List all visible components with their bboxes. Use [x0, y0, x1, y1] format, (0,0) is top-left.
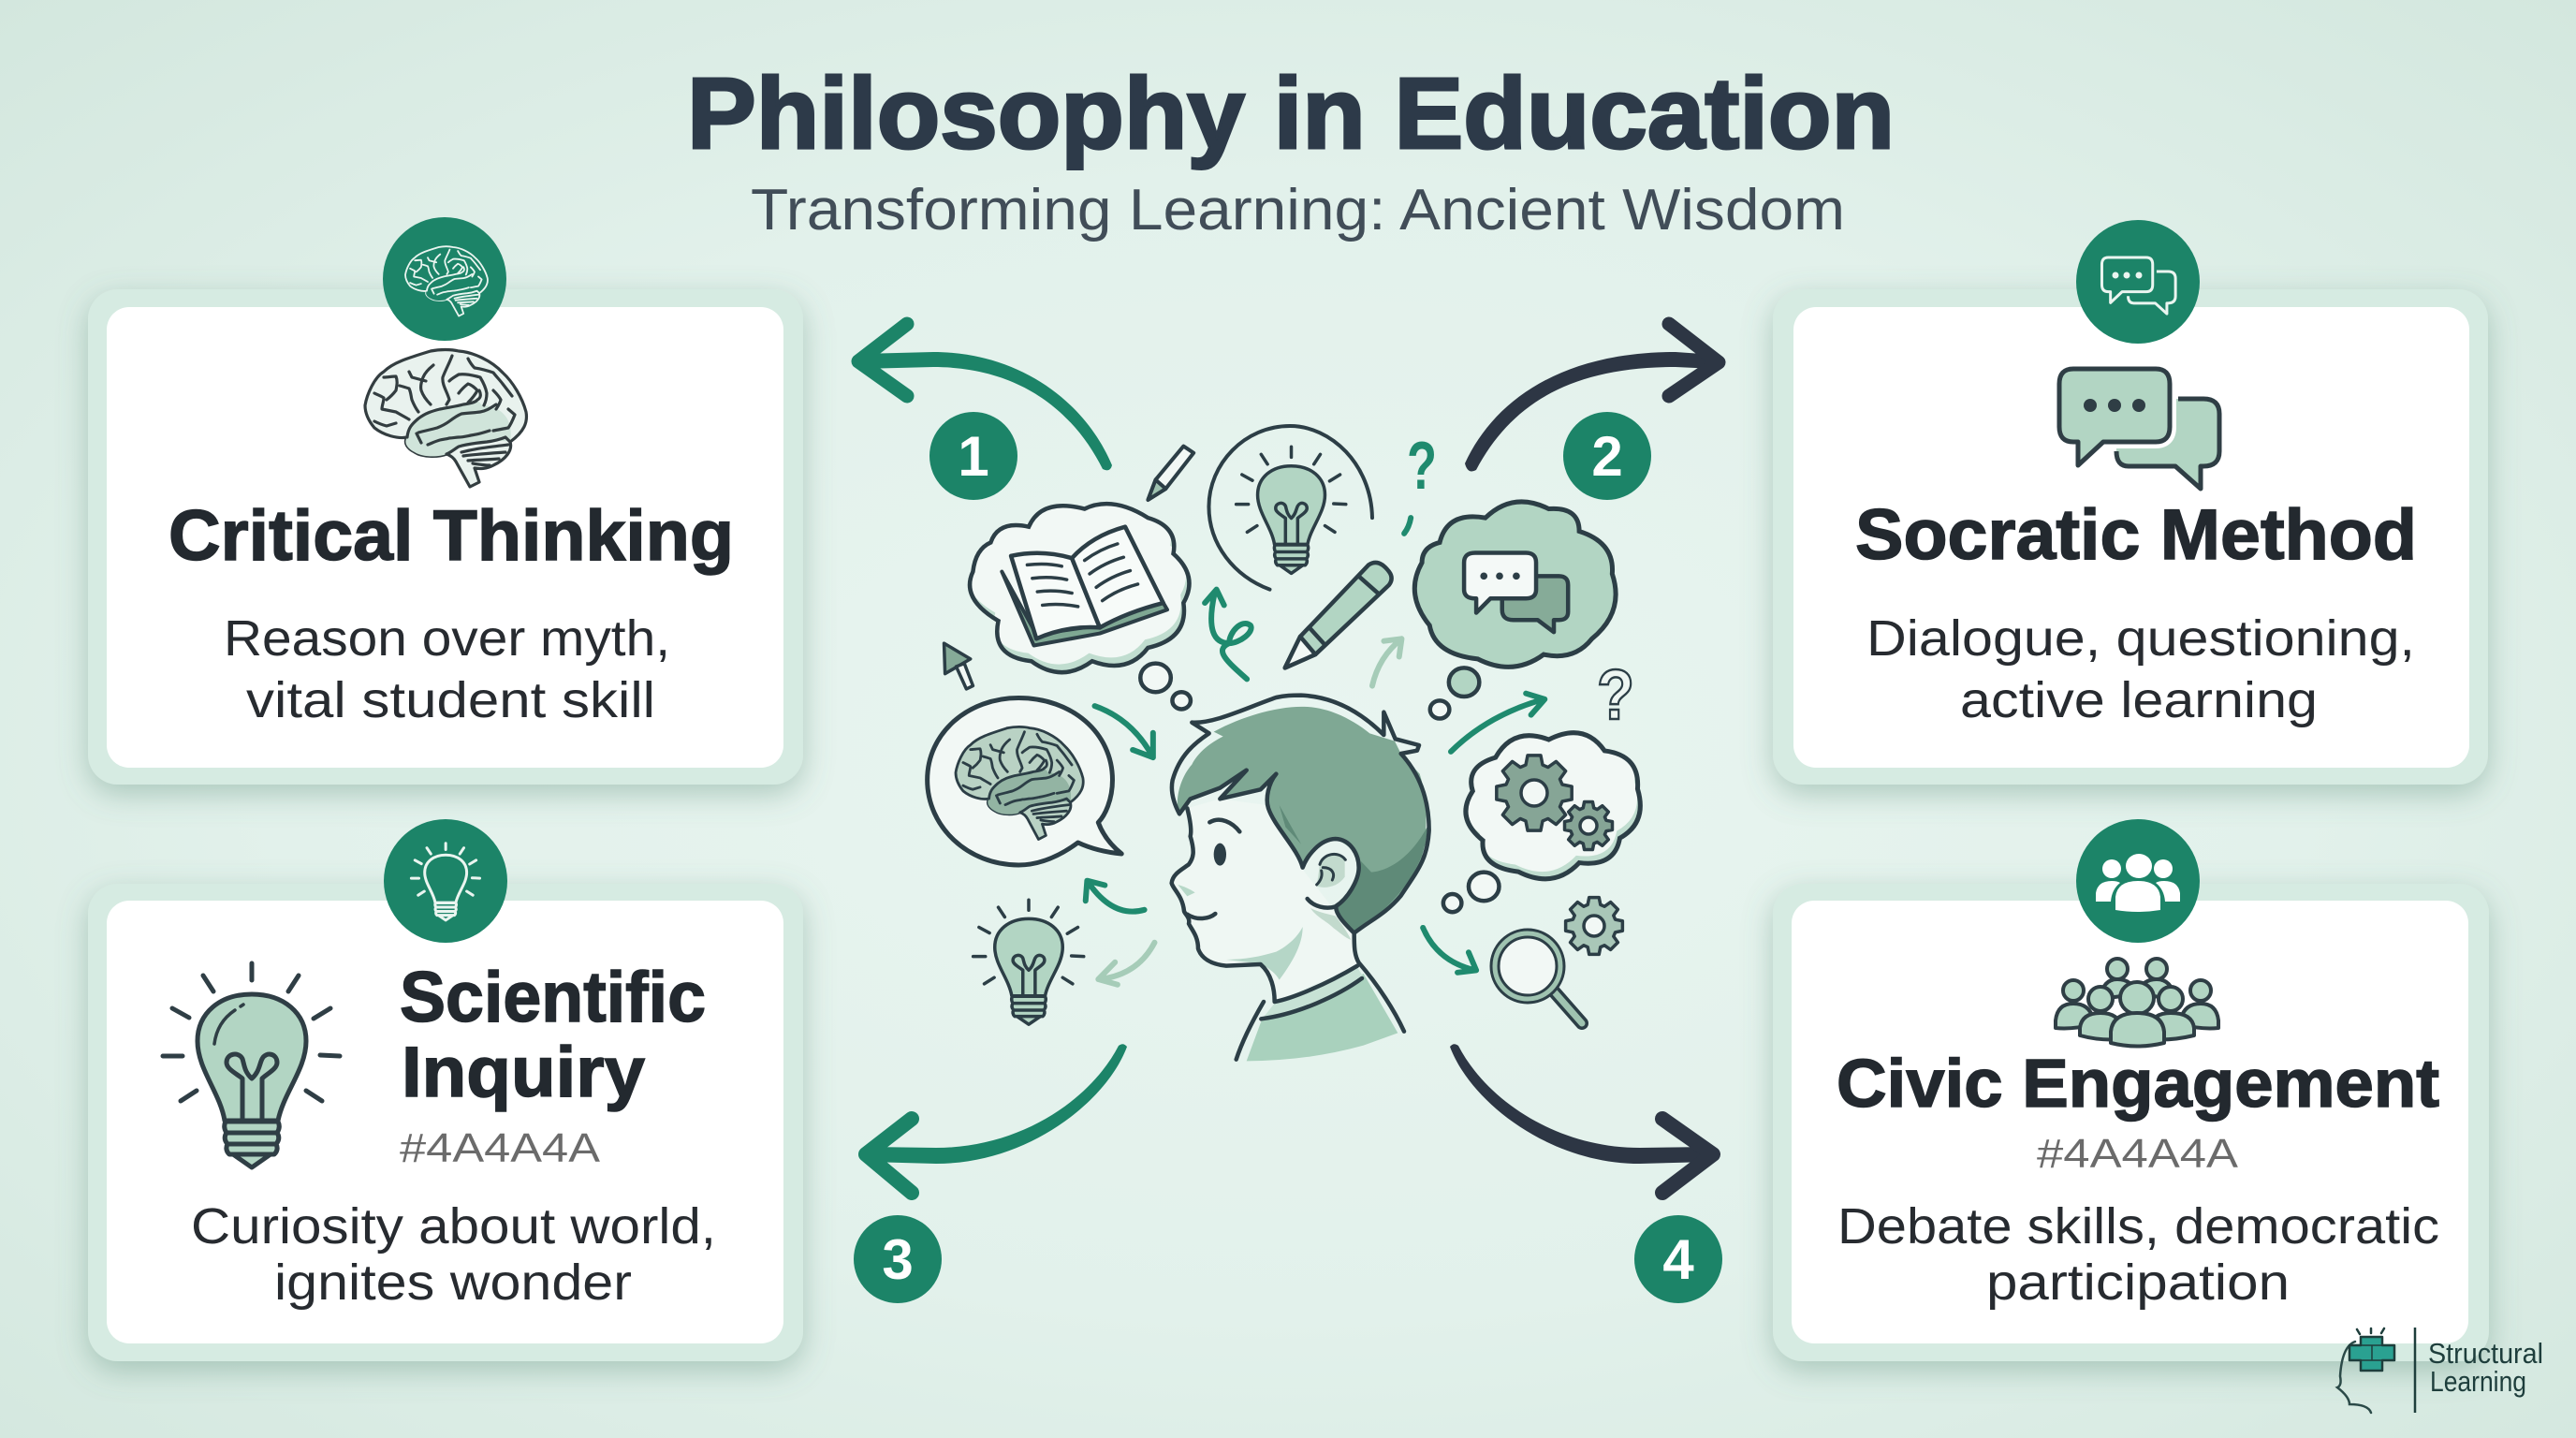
number badge 2: 2 — [1591, 425, 1623, 488]
arrow 1 — [858, 324, 1112, 470]
badge icon: brain — [383, 217, 506, 341]
body text: Dialogue, questioning, — [1866, 610, 2415, 667]
heading: Inquiry — [402, 1033, 645, 1112]
badge icon: light bulb — [384, 819, 507, 943]
body text — [191, 1198, 716, 1311]
body text: Curiosity about world, — [191, 1198, 716, 1255]
heading: Critical Thinking — [168, 496, 734, 576]
icon: light bulb — [163, 963, 340, 1167]
icon: cursor — [944, 643, 973, 689]
icon: brain in bubble — [956, 726, 1083, 840]
question mark: outlined: ? — [1597, 655, 1634, 735]
icon: large gear — [1497, 756, 1572, 830]
speech bubble — [928, 697, 1121, 865]
subtitle: Transforming Learning: Ancient Wisdom — [751, 178, 1845, 242]
number badge 3: 3 — [882, 1228, 914, 1291]
body text: Reason over myth, — [224, 610, 670, 667]
number badge 4 — [1634, 1215, 1722, 1303]
icon: small pencil — [1148, 447, 1193, 500]
number badge 3 — [854, 1215, 942, 1303]
body text: participation — [1986, 1255, 2290, 1311]
icon: bulb lower left — [973, 900, 1084, 1024]
logo: structural learning: Learning — [2430, 1365, 2526, 1398]
panel: socratic method — [1773, 220, 2488, 785]
flow arrows — [1086, 590, 1544, 985]
heading — [400, 958, 706, 1112]
thought bubbles — [1140, 664, 1499, 912]
panel: scientific inquiry — [88, 819, 803, 1361]
icon: bulb top — [1237, 447, 1346, 573]
number badge 1 — [929, 412, 1017, 500]
icon: chat bubbles — [2059, 369, 2219, 489]
badge icon: chat — [2076, 220, 2200, 344]
thought cloud: dialogue — [1414, 502, 1616, 667]
central illustration: student thinking — [928, 426, 1640, 1061]
icon: people — [2056, 959, 2218, 1047]
icon: magnifying glass — [1495, 933, 1582, 1023]
body text: active learning — [1960, 672, 2318, 728]
body text — [1837, 1198, 2439, 1311]
panel: critical thinking — [88, 217, 803, 785]
number badge 1: 1 — [958, 425, 989, 488]
body text: Debate skills, democratic — [1837, 1198, 2439, 1255]
icon: small gear — [1565, 802, 1612, 849]
thought cloud: gears — [1463, 726, 1640, 879]
hex label: #4A4A4A — [400, 1125, 601, 1171]
bulb halo arc — [1208, 426, 1372, 590]
logo: structural learning: Structural — [2428, 1337, 2543, 1370]
hex label: #4A4A4A — [2037, 1131, 2239, 1177]
icon: loose gear — [1566, 898, 1622, 954]
idea cluster drawn in local coordinates — [928, 426, 1640, 985]
small comma mark — [1404, 518, 1411, 534]
heading: Civic Engagement — [1837, 1047, 2439, 1122]
icon: large pencil — [1285, 563, 1392, 668]
arrow 4 — [1450, 1044, 1713, 1193]
body text — [224, 610, 670, 728]
title: Philosophy in Education — [687, 56, 1895, 169]
question mark: green: ? — [1407, 429, 1437, 504]
heading: Scientific — [400, 958, 706, 1037]
number badge 4: 4 — [1662, 1228, 1694, 1291]
student figure — [1172, 696, 1429, 1061]
panel: civic engagement — [1773, 819, 2489, 1361]
arrow 3 — [866, 1044, 1127, 1193]
heading: Socratic Method — [1855, 495, 2417, 575]
body text: ignites wonder — [274, 1255, 632, 1311]
body text: vital student skill — [246, 672, 655, 728]
body text — [1866, 610, 2415, 728]
badge icon: group — [2076, 819, 2200, 943]
arrow 2 — [1465, 324, 1719, 471]
thought cloud: book — [967, 496, 1189, 672]
icon: brain — [365, 350, 526, 487]
number badge 2 — [1563, 412, 1651, 500]
logo: structural learning — [2337, 1328, 2543, 1413]
